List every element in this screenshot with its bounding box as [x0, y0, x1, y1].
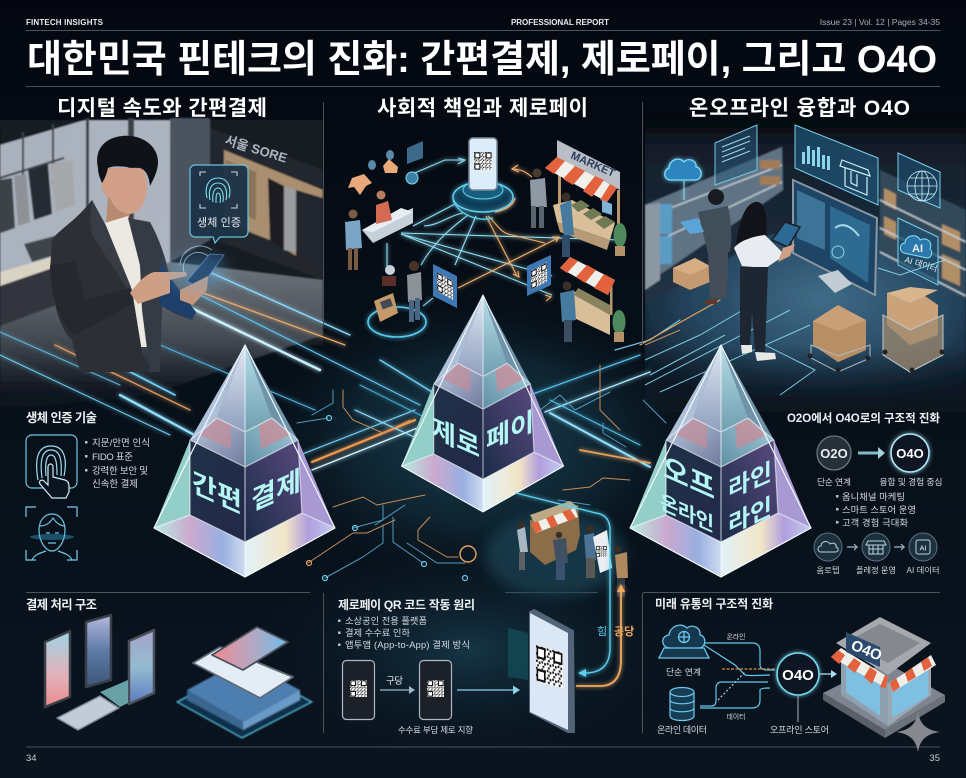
icon: face scan	[26, 507, 77, 560]
streak bundle: digital speed lines	[0, 270, 720, 578]
O2O badge	[817, 436, 851, 470]
flat phone	[57, 680, 128, 730]
block: future retail	[655, 596, 837, 735]
icon: AI chip	[909, 533, 937, 561]
O4O badge: O4O	[896, 446, 924, 461]
arrow	[858, 447, 885, 459]
icon: AI chip: AI	[919, 544, 927, 552]
network lines orange	[458, 165, 559, 301]
bullets	[85, 438, 150, 490]
prism: 간편결제: 결제	[251, 464, 301, 517]
panel: O4O holograms	[645, 125, 945, 395]
market stall 1	[530, 140, 626, 257]
store building: O4O	[849, 637, 885, 665]
small market scene	[485, 501, 628, 597]
white phone	[193, 647, 293, 698]
block: O2O to O4O: 옴니채널 마케팅	[842, 492, 905, 502]
monitor	[793, 180, 877, 295]
kiosk and staff	[345, 190, 413, 270]
label: data: 데이터	[727, 712, 745, 721]
arrow: 구당: 구당	[386, 676, 403, 687]
platform stack	[177, 660, 312, 738]
businessman	[680, 189, 731, 304]
AI hologram: AI	[912, 243, 923, 255]
page number left: 34	[26, 753, 37, 764]
heading: online-offline convergence: 온오프라인 융합과 O4O	[689, 97, 910, 120]
O4O badge	[891, 434, 929, 472]
block: QR principle: 수수료 부담 제로 지향	[398, 725, 473, 735]
label: online: 온라인	[727, 632, 745, 641]
bullets: 지문/안면 인식	[92, 438, 150, 449]
dashboard hologram	[795, 125, 878, 205]
store sign: 서울 SORE	[223, 133, 289, 166]
central phone	[469, 138, 497, 190]
block: O2O to O4O: 옴로텝	[816, 565, 840, 575]
heading: social responsibility: 사회적 책임과 제로페이	[377, 97, 588, 120]
phone b	[86, 615, 111, 687]
big phone with QR	[508, 610, 574, 732]
block: O2O to O4O: AI 데이터	[906, 565, 940, 575]
block: biometrics: 생체 인증 기술	[26, 410, 97, 425]
lower floor glow	[260, 540, 680, 760]
prism: 제로페이: 페이	[486, 405, 534, 456]
block: QR principle: 소상공인 전용 플랫폼	[345, 616, 427, 626]
cart with box	[808, 305, 870, 372]
block: payment processing: 결제 처리 구조	[26, 597, 97, 612]
block: QR principle: 앱투앱 (App-to-App) 결제 방식	[345, 639, 470, 650]
panel: Zero Pay network	[345, 138, 626, 342]
page number right: 35	[929, 753, 940, 764]
market stall 1: MARKET	[569, 150, 617, 180]
bullets: 신속한 결제	[92, 479, 138, 490]
phone a	[45, 631, 70, 707]
block: future retail: 온라인 데이터	[657, 725, 707, 735]
prism: 온오프라인: 라인	[728, 493, 772, 540]
header labels: PROFESSIONAL REPORT	[511, 18, 609, 27]
prism: 간편결제	[154, 345, 335, 577]
bullets: FIDO 표준	[92, 452, 133, 463]
callout: biometric authentication: 생체 인증	[197, 216, 241, 229]
arrow	[894, 544, 904, 550]
arrow to store	[819, 670, 837, 678]
floating payment icons	[348, 141, 423, 195]
prism: 온오프라인	[630, 345, 811, 577]
header labels	[26, 17, 940, 27]
cloud hologram	[665, 159, 701, 200]
header labels: FINTECH INSIGHTS	[26, 18, 104, 27]
arrow to big phone	[457, 686, 520, 694]
icon: cloud	[814, 533, 842, 561]
text hologram	[715, 125, 757, 185]
flow lines: rest and cost	[516, 493, 625, 686]
block: payment processing	[26, 597, 312, 738]
AI hologram	[898, 218, 939, 285]
fingerprint scan glow	[168, 246, 228, 292]
icon: cloud laptop	[659, 625, 709, 658]
heading: digital speed: 디지털 속도와 간편결제	[57, 97, 267, 120]
small phone 1	[342, 660, 374, 720]
block: future retail: 미래 유통의 구조적 진화	[655, 596, 773, 611]
QR stand left	[433, 264, 457, 308]
block: O2O to O4O: 고객 경험 극대화	[842, 517, 908, 528]
block: O2O to O4O: 플레정 운영	[856, 565, 896, 575]
block: QR principle: 결제 수수료 인하	[345, 628, 410, 638]
man using phone	[50, 136, 224, 372]
block: QR principle	[338, 597, 520, 735]
scene: left store interior	[0, 118, 323, 410]
centre floor glow	[260, 300, 700, 580]
flow lines	[700, 643, 775, 708]
block: future retail: 단순 연계	[666, 666, 701, 677]
icon: fingerprint touch	[26, 435, 77, 498]
block: biometrics	[26, 410, 150, 560]
block: future retail: 오프라인 스토어	[770, 725, 829, 735]
block: O2O to O4O: 단순 연계	[817, 476, 851, 487]
phone c	[129, 630, 154, 704]
block: QR principle: 제로페이 QR 코드 작동 원리	[338, 597, 475, 612]
callout: biometric authentication	[190, 165, 248, 243]
block: O2O to O4O: 스마트 스토어 운영	[842, 505, 916, 515]
flow label: 힘: 힘	[597, 625, 607, 638]
small phone 2	[420, 660, 452, 720]
circuit nodes	[306, 416, 476, 580]
AI hologram: AI 데이터	[903, 254, 939, 274]
prism: 온오프라인: 온라인	[660, 491, 714, 537]
store building	[823, 617, 945, 738]
O2O badge: O2O	[820, 446, 848, 461]
prism: 제로페이	[402, 295, 564, 512]
icon: store	[862, 533, 890, 561]
header labels: Issue 23 | Vol. 12 | Pages 34-35	[820, 17, 940, 27]
O4O hub	[777, 653, 819, 695]
prism: 제로페이: 제로	[432, 412, 480, 463]
bullets: 강력한 보안 및	[92, 465, 148, 477]
prism: 온오프라인: 라인	[728, 458, 772, 505]
watermark star	[896, 712, 940, 752]
floor circuit lines	[645, 260, 945, 395]
block: O2O to O4O: 융합 및 경험 중심	[880, 476, 942, 487]
market stall 2	[560, 257, 626, 342]
O4O hub: O4O	[782, 667, 814, 684]
block: O2O to O4O	[787, 411, 942, 575]
globe hologram	[898, 153, 940, 208]
flow label: 공당: 공당	[614, 625, 634, 638]
prism: 온오프라인: 오프	[663, 452, 715, 506]
booth person and sign	[368, 261, 426, 337]
network lines blue	[387, 158, 620, 306]
block: O2O to O4O: O2O에서 O4O로의 구조적 진화	[787, 411, 940, 425]
arrow	[847, 544, 857, 550]
prism: 간편결제: 간편	[192, 466, 242, 519]
pink phone	[212, 627, 288, 670]
phone pedestal	[453, 181, 515, 219]
scene: right O4O store	[645, 120, 966, 412]
title: 대한민국 핀테크의 진화: 간편결제, 제로페이, 그리고 O4O	[27, 39, 937, 81]
QR stand right	[527, 255, 551, 296]
shelf and box	[673, 258, 710, 290]
icon: database	[670, 688, 694, 720]
woman with tablet	[734, 202, 800, 361]
trolley with box	[882, 287, 944, 372]
arrow: 구당	[380, 676, 415, 694]
